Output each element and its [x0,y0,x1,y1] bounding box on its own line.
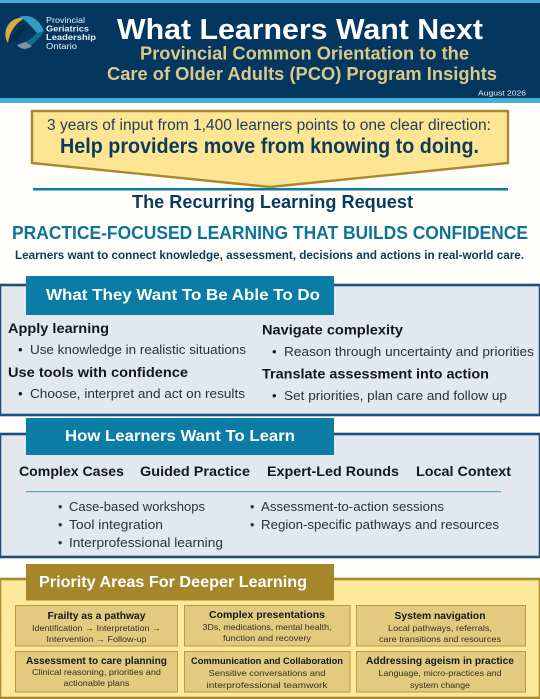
card: complex presentations: 3Ds, medications, mental health, [202,622,332,632]
tab heading: How Learners Want To Learn [65,428,295,445]
learning activities: Case-based workshops [69,500,205,514]
card: assessment to care planning: actionable plans [64,678,130,688]
summary sentence: Learners want to connect knowledge, assessment, decisions and actions in real-world care. [15,248,524,262]
callout text: Help providers move from knowing to doing. [60,135,479,158]
card: addressing ageism: Language, micro-practices and [378,668,502,678]
icon: organisation logo [5,16,44,49]
left column: Choose, interpret and act on results [30,386,246,401]
card: frailty: Identification → Interpretation → [32,623,161,633]
panel: how learners want to learn [0,418,540,557]
learning activities: Assessment-to-action sessions [261,500,444,514]
card: frailty: Intervention → Follow-up [46,634,147,644]
learning formats: Local Context [416,463,511,479]
card: addressing ageism: system change [410,680,470,690]
left column: • [18,386,23,401]
right column: Set priorities, plan care and follow up [284,388,507,403]
heading: recurring learning request: The Recurring Learning Request [132,192,413,212]
date: August 2026 [478,88,526,98]
learning activities: Tool integration [69,518,163,532]
tab heading [26,276,334,315]
subtitle: Provincial Common Orientation to the [140,44,469,64]
learning formats [19,463,511,479]
left column: • [18,342,23,357]
card: communication and collaboration: Sensitive conversations and [208,668,326,678]
callout text: 3 years of input from 1,400 learners points to one clear direction: [47,117,491,134]
logo wordmark: Provincial [46,16,85,25]
right column: Reason through uncertainty and priorities [284,344,535,359]
card: assessment to care planning: Assessment to care planning [26,656,167,667]
logo wordmark: Geriatrics [46,24,89,34]
learning activities: • [58,536,62,550]
learning activities: Interprofessional learning [69,536,223,550]
learning activities [58,500,499,550]
logo wordmark: Ontario [46,42,78,51]
panel: priority areas [0,564,540,698]
tab heading [26,418,334,455]
card: system navigation [356,606,526,646]
learning activities: • [58,518,62,532]
card: system navigation: care transitions and resources [379,634,501,644]
card: frailty: Frailty as a pathway [48,611,146,622]
card: assessment to care planning: Clinical reasoning, priorities and [32,667,161,677]
card: assessment to care planning [16,652,178,692]
learning formats: Expert-Led Rounds [267,463,399,479]
subtitle: Care of Older Adults (PCO) Program Insights [107,64,497,84]
right column: Navigate complexity [262,322,403,338]
learning activities: • [250,500,254,514]
card: addressing ageism [356,652,526,692]
card: communication and collaboration [184,652,350,692]
left column: Apply learning [8,320,109,336]
card: frailty [16,606,178,646]
learning activities: • [58,500,62,514]
callout arrow [32,111,508,187]
subtitle [107,44,497,84]
card: complex presentations: function and recovery [223,633,312,643]
left column: Use tools with confidence [8,364,188,380]
tab heading [26,564,334,600]
tab heading: Priority Areas For Deeper Learning [39,574,307,591]
header banner [0,0,540,103]
card: complex presentations [184,606,350,646]
left column [8,320,247,401]
right column: Translate assessment into action [262,366,489,382]
learning activities: • [250,518,254,532]
learning formats: Guided Practice [140,463,250,479]
logo wordmark: Leadership [46,33,96,42]
logo wordmark [46,16,96,51]
callout text [47,117,491,158]
learning activities: Region-specific pathways and resources [261,518,499,532]
right column [262,322,535,403]
left column: Use knowledge in realistic situations [30,342,247,357]
card: communication and collaboration: interprofessional teamwork [206,680,328,690]
panel: what they want to be able to do [0,276,540,415]
card: system navigation: System navigation [394,611,486,622]
learning formats: Complex Cases [19,463,124,479]
tab heading: What They Want To Be Able To Do [46,287,320,304]
card: communication and collaboration: Communication and Collaboration [191,656,343,667]
card: complex presentations: Complex presentations [209,610,325,621]
right column: • [272,388,277,403]
right column: • [272,344,277,359]
title: What Learners Want Next [117,14,483,46]
card: addressing ageism: Addressing ageism in practice [366,656,514,667]
card: system navigation: Local pathways, referrals, [388,623,492,633]
